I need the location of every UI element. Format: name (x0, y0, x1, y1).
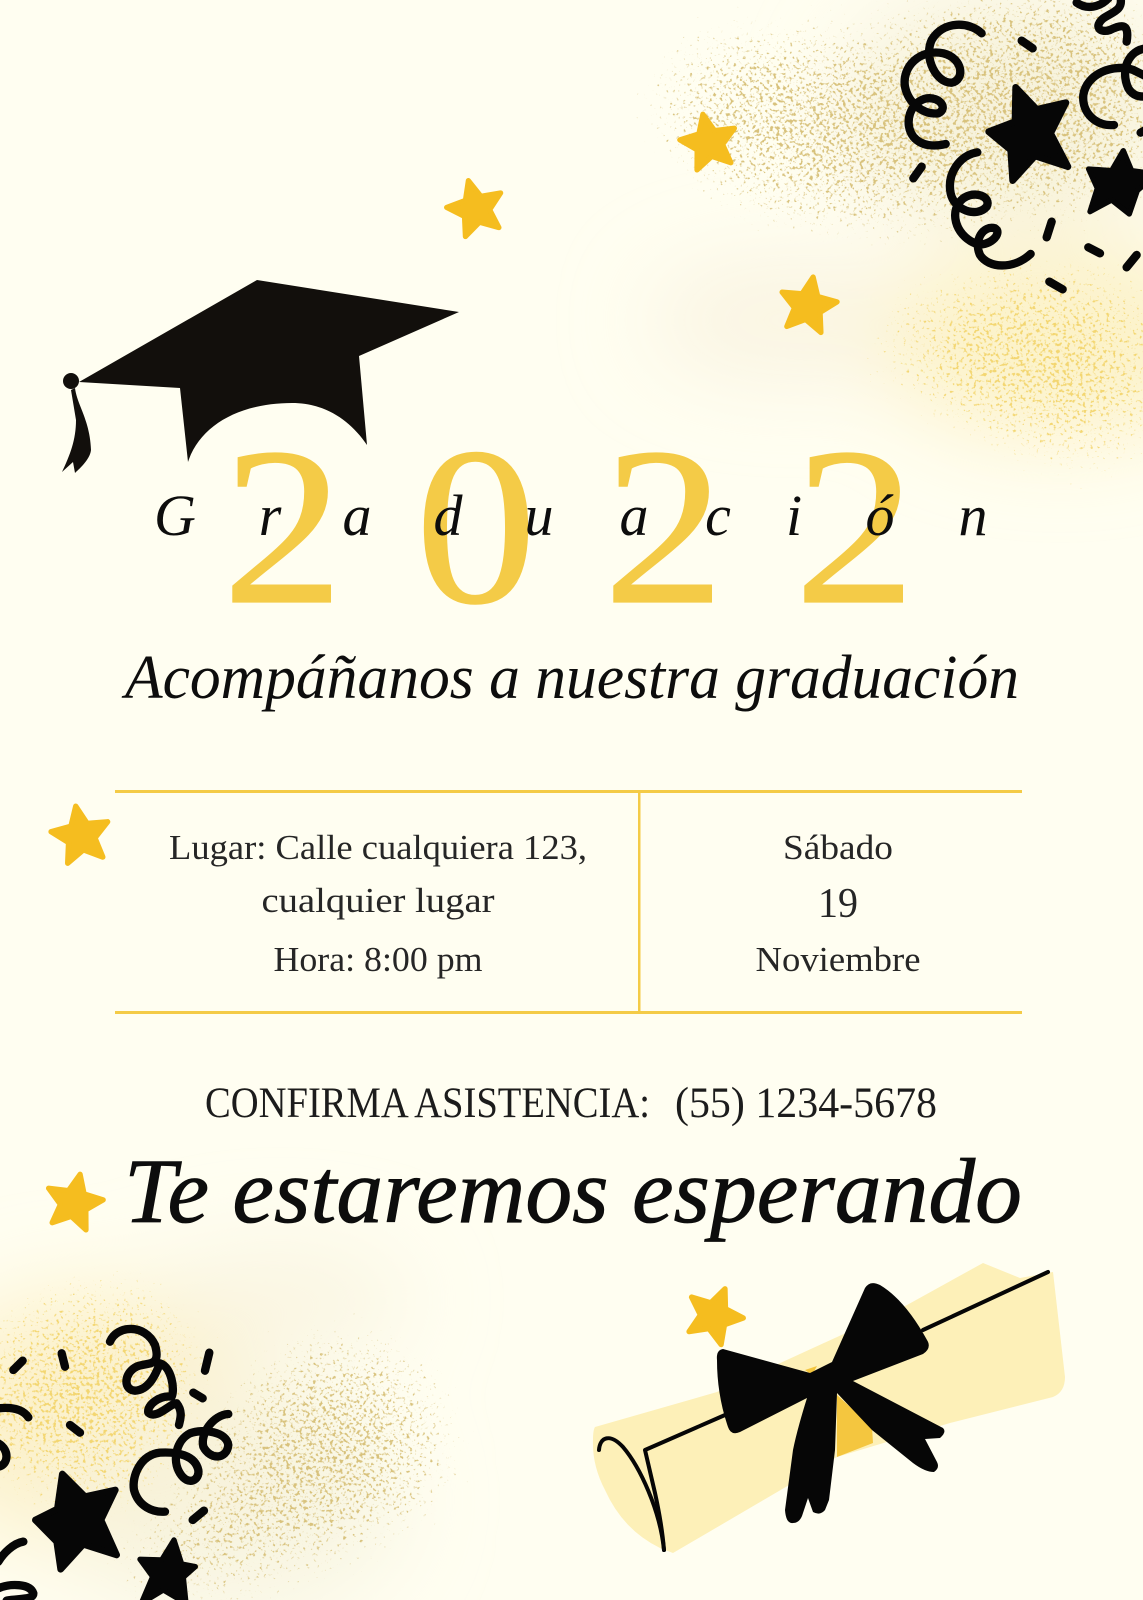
confetti: top right (905, 0, 1143, 289)
gold dust: bottom left (0, 1235, 510, 1600)
RSVP line: (55) 1234-5678 (675, 1080, 937, 1127)
icon: graduation cap (62, 280, 459, 473)
year 2022: 2 (794, 401, 916, 651)
RSVP line: CONFIRMA ASISTENCIA: (205, 1080, 650, 1127)
year 2022 (222, 401, 916, 651)
year 2022: 0 (415, 401, 537, 651)
star: top centre right (676, 108, 741, 172)
closing message: Te estaremos esperando (124, 1140, 1022, 1242)
place and time: Hora: 8:00 pm (274, 940, 482, 979)
year 2022: 2 (603, 401, 725, 651)
title: Graduación: Graduación (154, 483, 988, 548)
star: above diploma (679, 1278, 751, 1349)
place and time (169, 828, 587, 979)
subtitle: Acompáñanos a nuestra graduación (121, 644, 1019, 712)
date (756, 828, 920, 979)
date: Noviembre (756, 940, 920, 979)
details table (115, 790, 1022, 1014)
confetti: bottom left (0, 1329, 228, 1600)
star: left of table (47, 801, 114, 865)
date: 19 (818, 881, 858, 927)
star: lower left (42, 1168, 107, 1232)
star: right middle (776, 272, 841, 334)
date: Sábado (783, 828, 893, 867)
RSVP line (205, 1080, 937, 1127)
star: upper centre (441, 173, 509, 239)
gold dust: top right (545, 0, 1143, 540)
icon: diploma with bow (593, 1263, 1065, 1553)
place and time: Lugar: Calle cualquiera 123, (169, 828, 587, 867)
place and time: cualquier lugar (262, 881, 495, 920)
year 2022: 2 (222, 401, 344, 651)
